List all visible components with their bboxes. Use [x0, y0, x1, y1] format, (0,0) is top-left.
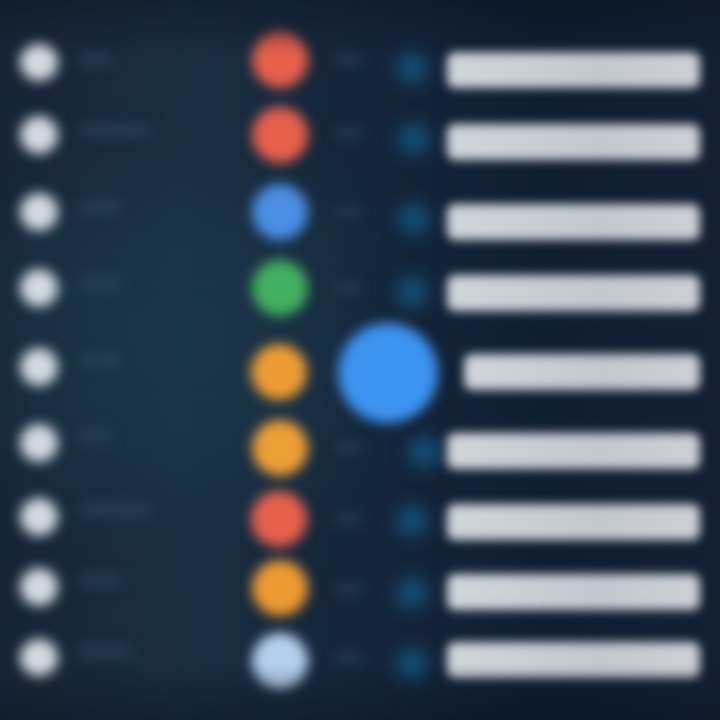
row 1 [11, 24, 708, 98]
background glow [0, 200, 340, 480]
row 9 [11, 624, 708, 698]
row 2 [11, 98, 708, 172]
row 6 [12, 410, 708, 485]
large blue circle [338, 323, 438, 423]
row 5 [12, 334, 708, 410]
row 8 [11, 551, 708, 626]
row 7 [11, 482, 708, 556]
row 3 [12, 175, 708, 249]
row 4 [12, 252, 708, 324]
